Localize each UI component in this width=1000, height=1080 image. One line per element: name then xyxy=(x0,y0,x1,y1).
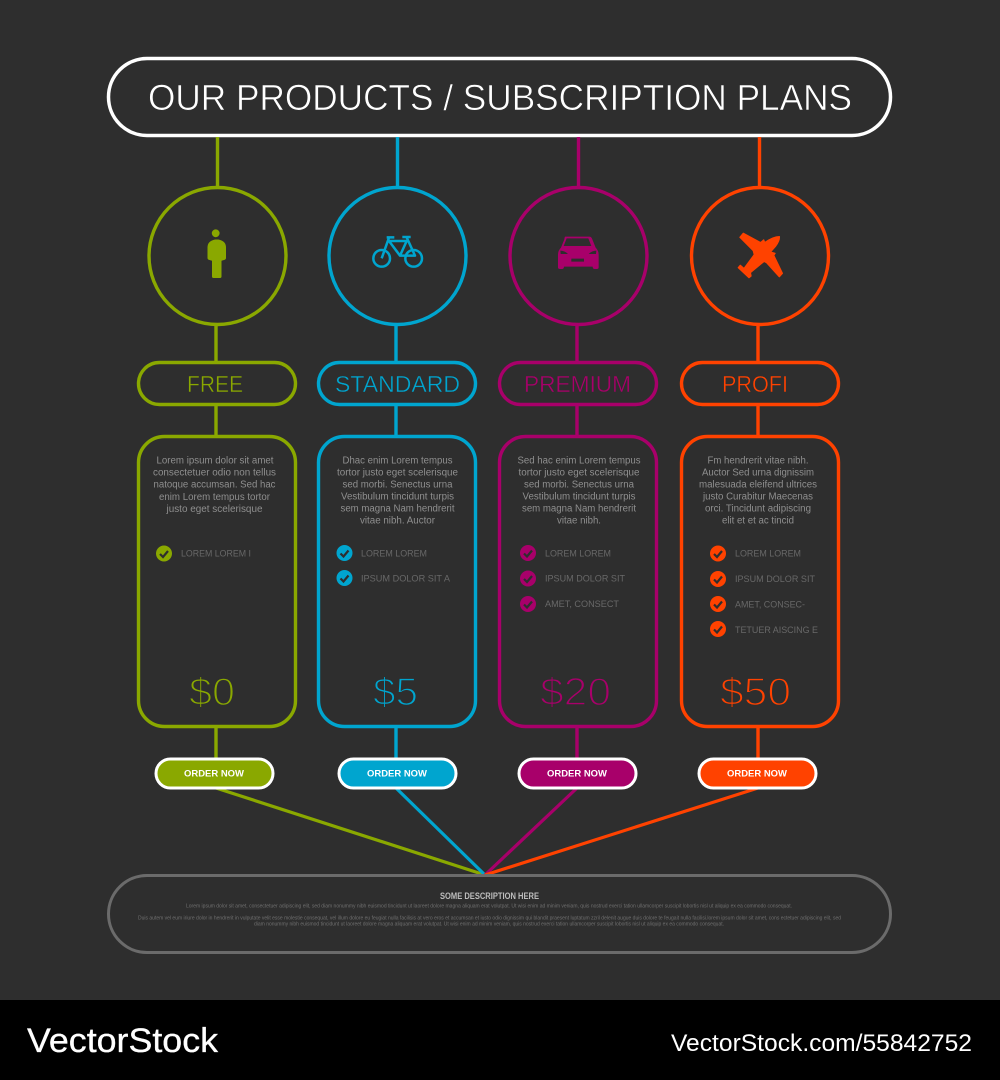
card: free xyxy=(138,436,296,726)
description text: Lorem ipsum dolor sit amet, consectetuer adipiscing elit, sed diam nonummy nibh euismod tincidunt ut laoreet dolore magna aliquam erat volutpat. Ut wisi enim ad minim veniam, quis nostrud exerci tation ullamcorper suscipit lobortis nisl ut aliquip ex ea commodo consequat. xyxy=(186,904,792,910)
description: Dhac enim Lorem tempus xyxy=(342,456,452,466)
features: LOREM LOREM xyxy=(735,548,801,560)
description: vitae nibh. Auctor xyxy=(360,516,436,526)
features: LOREM LOREM xyxy=(545,548,611,560)
price: $20 xyxy=(540,671,611,714)
features xyxy=(156,546,251,562)
description: elit et et ac tincid xyxy=(722,516,794,526)
description: sem magna Nam hendrerit xyxy=(340,504,455,514)
description: vitae nibh. xyxy=(557,516,601,526)
button: order now xyxy=(519,759,636,788)
features xyxy=(336,545,451,586)
plan name: profi xyxy=(682,362,838,404)
features: AMET, CONSECT xyxy=(545,599,619,610)
price: $5 xyxy=(373,671,418,714)
plan name: free: FREE xyxy=(187,371,243,397)
card: standard xyxy=(318,436,476,726)
button: order now xyxy=(156,759,273,788)
description: Vestibulum tincidunt turpis xyxy=(341,492,454,502)
description: justo Curabitur Maecenas xyxy=(702,492,813,502)
description: consectetuer odio non tellus xyxy=(153,468,276,478)
plan name: premium xyxy=(500,362,656,404)
description panel xyxy=(108,876,890,952)
description: sed morbi. Senectus urna xyxy=(524,480,634,490)
title: OUR PRODUCTS / SUBSCRIPTION PLANS xyxy=(148,77,852,118)
features: AMET, CONSEC- xyxy=(735,600,805,610)
footer bar xyxy=(0,1000,1000,1080)
features: TETUER AISCING E xyxy=(735,625,818,636)
features: LOREM LOREM I xyxy=(181,548,251,560)
description text: Duis autem vel eum iriure dolor in hendrerit in vulputate velit esse molestie consequat, vel illum dolore eu feugiat nulla facilisis at vero eros et accumsan et iusto odio dignissim qui blandit praesent luptatum zzril delenit augue duis dolore te feugait nulla facilisi.lorem ipsum dolor sit amet, cons ectetuer adipiscing elit, sed xyxy=(138,916,841,922)
panel: free plan xyxy=(138,137,296,788)
button: order now: ORDER NOW xyxy=(184,768,245,778)
description xyxy=(518,456,640,526)
features xyxy=(710,546,818,637)
icon: person xyxy=(208,229,226,278)
features: IPSUM DOLOR SIT A xyxy=(361,574,451,584)
plan name: standard: STANDARD xyxy=(335,371,460,397)
features: IPSUM DOLOR SIT xyxy=(545,574,625,584)
plan name: free xyxy=(138,362,296,404)
plan name: standard xyxy=(318,362,476,404)
button: order now xyxy=(339,759,456,788)
description: tortor justo eget scelerisque xyxy=(337,468,458,478)
icon: bicycle xyxy=(373,237,422,267)
button: order now: ORDER NOW xyxy=(367,768,428,778)
price: $0 xyxy=(189,671,235,714)
panel: premium plan xyxy=(500,137,656,788)
description text: diam nonummy nibh euismod tincidunt ut laoreet dolore magna aliquam erat volutpat. Ut wisi enim ad minim veniam, quis nostrud exerci tation ullamcorper suscipit lobortis nisl ut aliquip ex ea commodo consequat. xyxy=(254,922,724,928)
description: Vestibulum tincidunt turpis xyxy=(522,492,636,502)
description xyxy=(337,456,458,526)
connector lines to description xyxy=(216,788,758,875)
button: order now: ORDER NOW xyxy=(547,768,608,778)
description: sem magna Nam hendrerit xyxy=(522,504,636,514)
button: order now xyxy=(699,759,816,788)
description xyxy=(699,456,817,526)
description heading: SOME DESCRIPTION HERE xyxy=(440,891,539,902)
description: enim Lorem tempus tortor xyxy=(159,492,271,503)
description: sed morbi. Senectus urna xyxy=(342,480,453,490)
price: $50 xyxy=(720,671,791,714)
description: Sed hac enim Lorem tempus xyxy=(518,456,640,466)
description: natoque accumsan. Sed hac xyxy=(154,480,276,490)
button: order now: ORDER NOW xyxy=(727,768,788,778)
description: malesuada eleifend ultrices xyxy=(699,480,817,490)
features: LOREM LOREM xyxy=(361,548,427,560)
plan name: profi: PROFI xyxy=(722,371,788,397)
description: Auctor Sed urna dignissim xyxy=(702,468,814,478)
description: Lorem ipsum dolor sit amet xyxy=(156,456,274,466)
title xyxy=(108,58,890,136)
features: IPSUM DOLOR SIT xyxy=(735,574,815,585)
panel: profi plan xyxy=(682,137,838,788)
description: tortor justo eget scelerisque xyxy=(518,468,640,478)
description: justo eget scelerisque xyxy=(166,504,263,515)
card: premium xyxy=(500,436,656,726)
card: profi xyxy=(682,436,838,726)
panel: standard plan xyxy=(318,137,476,788)
description xyxy=(153,456,276,515)
description text xyxy=(138,904,841,928)
icon: car xyxy=(558,237,599,269)
icon: airplane xyxy=(738,233,782,278)
plan name: premium: PREMIUM xyxy=(524,371,631,397)
footer logo: VectorStock xyxy=(27,1022,219,1060)
footer url: VectorStock.com/55842752 xyxy=(671,1030,972,1057)
description: orci. Tincidunt adipiscing xyxy=(705,504,811,514)
description: Fm hendrerit vitae nibh. xyxy=(708,456,808,466)
features xyxy=(520,545,625,612)
